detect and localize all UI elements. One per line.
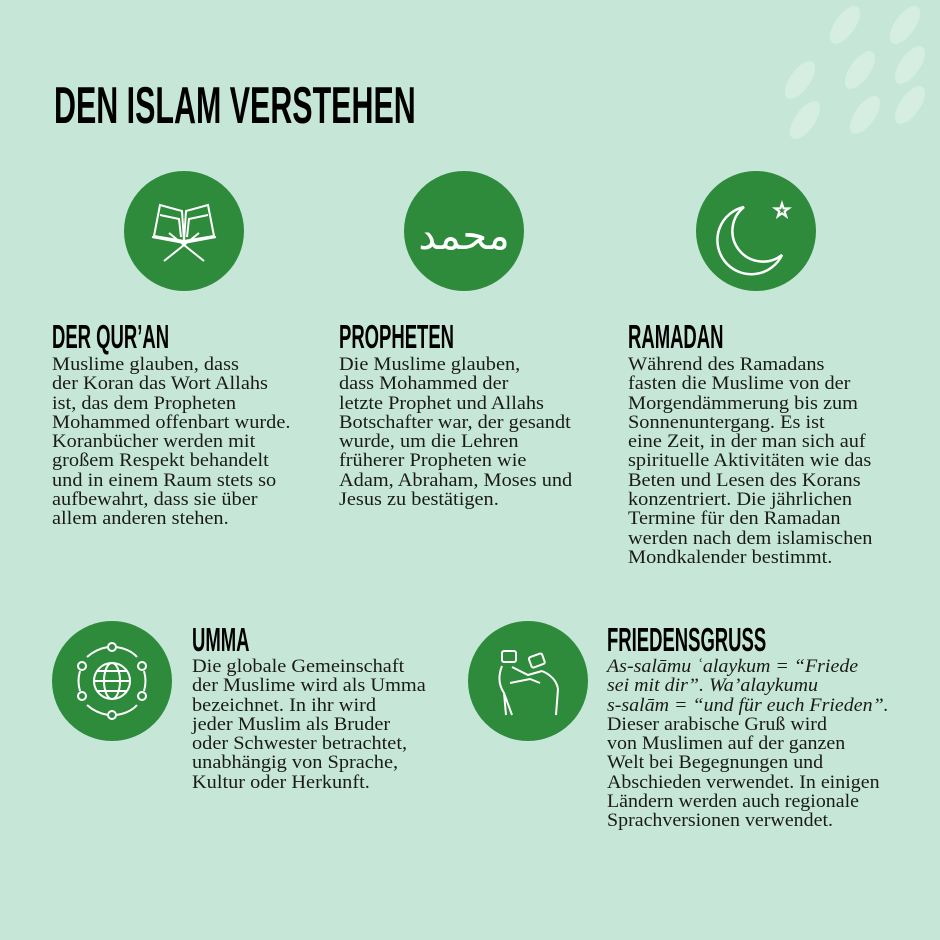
text: ramadan: Morgendämmerung bis zum — [628, 393, 858, 414]
text: quran: ist, das dem Propheten — [52, 393, 236, 414]
text: friedensgruss: sei mit dir”. Wa’alaykumu — [607, 675, 818, 696]
text: propheten: wurde, um die Lehren — [339, 431, 519, 452]
text: propheten: Jesus zu bestätigen. — [339, 489, 499, 510]
text: quran: großem Respekt behandelt — [52, 450, 269, 471]
text: umma: unabhängig von Sprache, — [192, 752, 398, 773]
text: friedensgruss — [606, 656, 889, 831]
text: ramadan: Sonnenuntergang. Es ist — [628, 412, 825, 433]
text: propheten: Botschafter war, der gesandt — [339, 412, 571, 433]
text: ramadan: eine Zeit, in der man sich auf — [628, 431, 866, 452]
text: quran: Muslime glauben, dass — [52, 354, 239, 375]
text: umma: bezeichnet. In ihr wird — [192, 695, 376, 716]
text: ramadan: konzentriert. Die jährlichen — [628, 489, 852, 510]
text: quran — [52, 354, 290, 529]
section: umma — [191, 621, 426, 793]
text: umma — [191, 656, 426, 793]
text: friedensgruss: von Muslimen auf der ganzen — [607, 733, 845, 754]
text: umma: Die globale Gemeinschaft — [192, 656, 404, 677]
text: ramadan: Mondkalender bestimmt. — [628, 547, 832, 568]
heading: ramadan: RAMADAN — [628, 318, 723, 355]
heading: der quran: DER QUR’AN — [52, 318, 169, 355]
text: quran: Mohammed offenbart wurde. — [52, 412, 290, 433]
text: quran: und in einem Raum stets so — [52, 470, 276, 491]
text: ramadan: Während des Ramadans — [628, 354, 824, 375]
heading: friedensgruss: FRIEDENSGRUSS — [607, 621, 766, 658]
icon: crescent: ☆ — [773, 200, 791, 222]
text: friedensgruss: Welt bei Begegnungen und — [607, 752, 823, 773]
heading: umma: UMMA — [192, 621, 249, 658]
text: umma: Kultur oder Herkunft. — [192, 772, 370, 793]
text: friedensgruss: Sprachversionen verwendet. — [607, 810, 833, 831]
text: quran: aufbewahrt, dass sie über — [52, 489, 257, 510]
text: propheten: früherer Propheten wie — [339, 450, 526, 471]
text: friedensgruss: Abschieden verwendet. In einigen — [607, 772, 880, 793]
icon: muhammad calligraphy: محمد — [418, 213, 510, 259]
text: quran: der Koran das Wort Allahs — [52, 373, 268, 394]
icon: crescent — [696, 171, 816, 291]
icon: globe network — [52, 621, 172, 741]
text: propheten: letzte Prophet und Allahs — [339, 393, 544, 414]
text: umma: der Muslime wird als Umma — [192, 675, 426, 696]
icon: greeting people — [468, 621, 588, 741]
text: umma: oder Schwester betrachtet, — [192, 733, 407, 754]
text: ramadan: Beten und Lesen des Korans — [628, 470, 861, 491]
text: quran: allem anderen stehen. — [52, 508, 229, 529]
section: ramadan — [628, 318, 872, 568]
icon: muhammad calligraphy — [404, 171, 524, 291]
text: ramadan: werden nach dem islamischen — [628, 528, 872, 549]
text: propheten: Adam, Abraham, Moses und — [339, 470, 572, 491]
heading: propheten: PROPHETEN — [339, 318, 454, 355]
text: friedensgruss: As-salāmu ʿalaykum = “Friede — [607, 656, 858, 677]
text: propheten — [339, 354, 572, 510]
text: propheten: dass Mohammed der — [339, 373, 508, 394]
text: propheten: Die Muslime glauben, — [339, 354, 520, 375]
text: ramadan — [628, 354, 872, 568]
text: friedensgruss: Ländern werden auch regionale — [607, 791, 859, 812]
section: propheten — [339, 318, 572, 510]
text: ramadan: spirituelle Aktivitäten wie das — [628, 450, 871, 471]
text: friedensgruss: s-salām = “und für euch Frieden”. — [607, 695, 889, 716]
text: quran: Koranbücher werden mit — [52, 431, 255, 452]
icon: quran — [124, 171, 244, 291]
text: umma: jeder Muslim als Bruder — [192, 714, 390, 735]
section: friedensgruss — [606, 621, 889, 831]
section: quran — [52, 318, 290, 529]
decorative leaves — [785, 6, 925, 139]
text: ramadan: Termine für den Ramadan — [628, 508, 841, 529]
title: DEN ISLAM VERSTEHEN — [54, 77, 416, 135]
text: ramadan: fasten die Muslime von der — [628, 373, 850, 394]
text: friedensgruss: Dieser arabische Gruß wird — [607, 714, 827, 735]
